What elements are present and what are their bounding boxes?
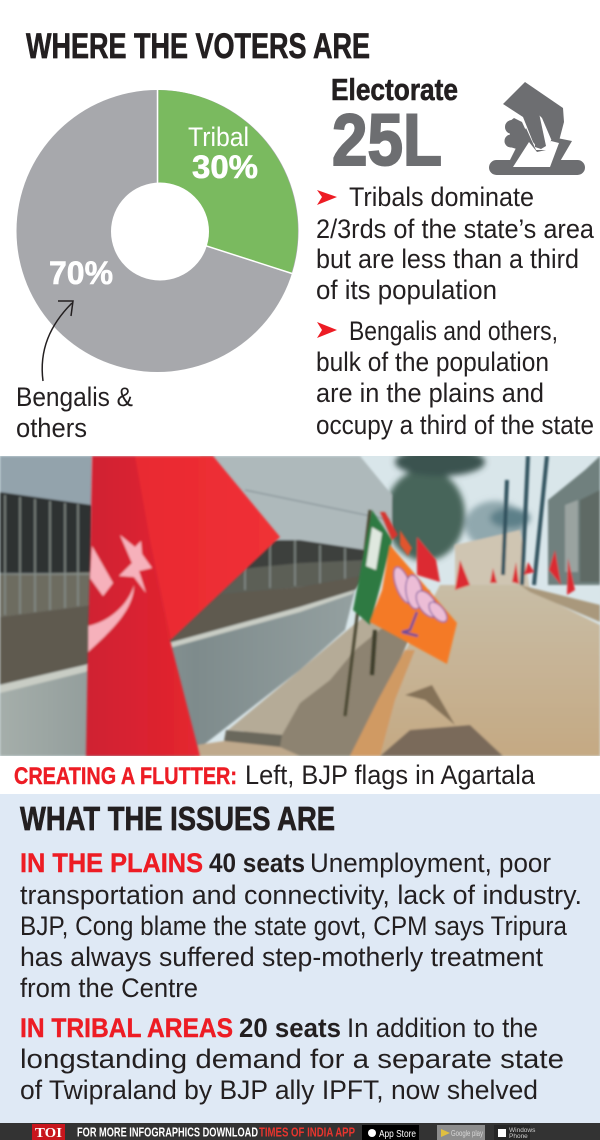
- text block: in tribal areas: IN TRIBAL AREAS: [20, 1013, 233, 1043]
- donut chart: voter share: [16, 90, 298, 372]
- badge: Windows Phone: [494, 1125, 536, 1140]
- label: Bengalis and others: [16, 382, 133, 443]
- trees: [385, 448, 530, 561]
- text block: in tribal areas: In addition to the: [347, 1013, 538, 1043]
- badge: Google play: Google play: [451, 1129, 483, 1138]
- title: where the voters are: WHERE THE VOTERS ARE: [26, 27, 370, 66]
- hammer: [90, 546, 113, 596]
- text block: in the plains: [20, 848, 582, 1003]
- footer message: TIMES OF INDIA APP: [259, 1124, 355, 1140]
- distant buildings: [455, 530, 530, 590]
- badge: Windows Phone: Windows: [509, 1127, 536, 1134]
- text block: in the plains: Unemployment, poor: [310, 848, 551, 878]
- text block: in tribal areas: 20 seats: [239, 1013, 341, 1043]
- value: 30%: 30%: [192, 149, 258, 185]
- text block: in tribal areas: longstanding demand for a separate state: [20, 1044, 564, 1074]
- text block: in the plains: transportation and connectivity, lack of industry.: [20, 880, 582, 910]
- text block: Bengali note: Bengalis and others,: [349, 316, 558, 346]
- text block: in tribal areas: [20, 1013, 564, 1105]
- pale pavement: [228, 607, 382, 736]
- bullet arrow: [317, 322, 337, 338]
- text block: Bengali note: bulk of the population: [316, 347, 549, 377]
- dark fence: [0, 490, 92, 576]
- red flag: hammer, sickle and star: [86, 456, 280, 756]
- stat: electorate 25L: [331, 72, 458, 181]
- text block: Bengali note: are in the plains and: [316, 378, 544, 408]
- crescent: [88, 585, 134, 652]
- value: 70%: 70%: [49, 255, 113, 291]
- text block: tribal note: [316, 182, 595, 305]
- label: Tribal: Tribal: [188, 122, 249, 152]
- logo: TOI: [32, 1124, 65, 1140]
- dirt ledge: [0, 575, 366, 685]
- road: [379, 584, 600, 756]
- footer bar: [0, 1123, 600, 1140]
- donut segment: Tribal 30%: [158, 90, 298, 273]
- badge: Google play: [437, 1125, 485, 1140]
- heading: what the issues are: WHAT THE ISSUES ARE: [20, 800, 335, 837]
- footer message: FOR MORE INFOGRAPHICS DOWNLOAD: [77, 1124, 258, 1140]
- text block: tribal note: but are less than a third: [316, 244, 579, 274]
- text block: in the plains: 40 seats: [209, 848, 305, 878]
- donut segment: Bengalis and others 70%: [16, 90, 298, 372]
- small red flags: [417, 537, 575, 595]
- caption: creating a flutter: CREATING A FLUTTER:: [14, 763, 237, 790]
- text block: tribal note: of its population: [316, 275, 497, 305]
- shadows on road: [380, 725, 503, 756]
- value: 25L: 25L: [332, 100, 442, 181]
- BJP flag with lotus: [345, 510, 457, 716]
- curb: [0, 590, 355, 756]
- text block: Bengali note: [316, 316, 594, 440]
- upper left wall: [0, 456, 92, 505]
- dirt verge: [246, 590, 430, 756]
- label: Bengalis and others: others: [16, 413, 87, 443]
- badge: App Store: App Store: [379, 1129, 416, 1140]
- text block: in the plains: has always suffered step-motherly treatment: [20, 942, 543, 972]
- text block: tribal note: Tribals dominate: [349, 182, 534, 212]
- upper right wall: [200, 456, 392, 555]
- bullet arrow: [317, 190, 337, 205]
- badge: App Store: [362, 1125, 419, 1140]
- badge: Windows Phone: Phone: [509, 1133, 528, 1140]
- pavement step lip: [224, 730, 282, 747]
- caption: creating a flutter: Left, BJP flags in Agartala: [245, 760, 536, 790]
- icon: hand casting ballot: [489, 82, 585, 175]
- label: Bengalis and others: Bengalis &: [16, 382, 133, 412]
- photo: party flags in Agartala street: [0, 448, 600, 756]
- arrow: Bengalis callout: [42, 301, 73, 381]
- text block: in the plains: from the Centre: [20, 973, 198, 1003]
- orange road edge: [350, 650, 415, 756]
- text block: in tribal areas: of Twipraland by BJP ally IPFT, now shelved: [20, 1075, 538, 1105]
- label: Electorate: Electorate: [331, 72, 458, 107]
- fence bars: [0, 495, 345, 615]
- caption: creating a flutter: [14, 760, 536, 790]
- panel: what the issues are: [0, 794, 600, 1123]
- poles: [503, 456, 547, 585]
- star: [119, 535, 152, 593]
- text block: in the plains: IN THE PLAINS: [20, 848, 203, 878]
